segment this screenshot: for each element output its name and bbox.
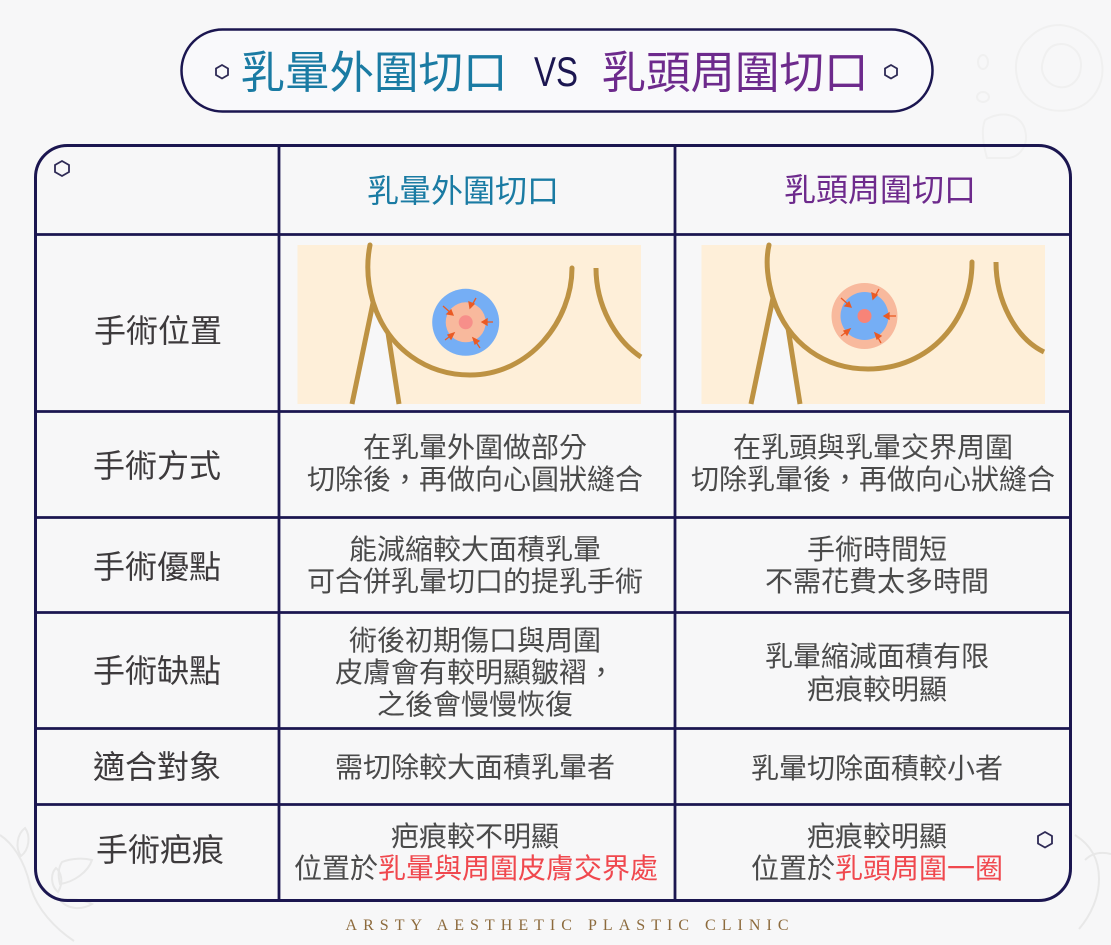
- column heading: areola: 乳暈外圍切口: [367, 173, 559, 209]
- disadvantages text: nipple: [765, 641, 989, 705]
- icon: hexagon left: [216, 65, 228, 78]
- icon: hexagon right: [885, 65, 897, 78]
- title: VS: VS: [534, 48, 578, 95]
- scar text: areola: [294, 821, 658, 884]
- title: nipple incision: 乳頭周圍切口: [601, 49, 869, 98]
- candidates text: areola: 需切除較大面積乳暈者: [335, 752, 615, 783]
- advantages text: nipple: 不需花費太多時間: [765, 566, 989, 597]
- row heading: position: 手術位置: [94, 313, 222, 349]
- comparison table: [35, 145, 1071, 900]
- scar text: nipple: [751, 821, 1003, 884]
- title: areola outer incision: 乳暈外圍切口: [240, 49, 508, 98]
- decoration: faint rose: [977, 25, 1102, 158]
- disadvantages text: areola: 皮膚會有較明顯皺褶，: [335, 657, 615, 688]
- method text: areola: 切除後，再做向心圓狀縫合: [307, 464, 643, 495]
- footer: clinic name: ARSTY AESTHETIC PLASTIC CLINIC: [346, 917, 789, 934]
- disadvantages text: areola: 術後初期傷口與周圍: [349, 625, 601, 656]
- method text: nipple: 切除乳暈後，再做向心狀縫合: [691, 464, 1055, 495]
- scar text: areola: 位置於乳暈與周圍皮膚交界處: [294, 853, 658, 884]
- scar text: nipple: 疤痕較明顯: [807, 821, 947, 852]
- table frame: [36, 146, 1070, 900]
- advantages text: areola: 可合併乳暈切口的提乳手術: [307, 566, 643, 597]
- disadvantages text: nipple: 疤痕較明顯: [807, 674, 947, 705]
- row heading: advantages: 手術優點: [93, 549, 221, 585]
- candidates text: nipple: 乳暈切除面積較小者: [751, 753, 1003, 784]
- row heading: scar: 手術疤痕: [96, 832, 224, 868]
- method text: areola: 在乳暈外圍做部分: [363, 432, 587, 463]
- disadvantages text: areola: 之後會慢慢恢復: [377, 689, 573, 720]
- illustration: areola incision: [298, 245, 641, 404]
- scar text: nipple: 位置於乳頭周圍一圈: [751, 853, 1003, 884]
- scar text: areola: 疤痕較不明顯: [391, 821, 559, 852]
- advantages text: nipple: [765, 534, 989, 597]
- illustration: nipple incision: [702, 245, 1045, 404]
- disadvantages text: areola: [335, 625, 615, 720]
- title pill: [182, 30, 932, 112]
- advantages text: areola: 能減縮較大面積乳暈: [349, 534, 601, 565]
- advantages text: areola: [307, 534, 643, 597]
- method text: nipple: 在乳頭與乳暈交界周圍: [733, 432, 1013, 463]
- row heading: candidates: 適合對象: [93, 749, 221, 785]
- icon: hexagon table bottom-right: [1038, 832, 1052, 848]
- icon: hexagon table top-left: [55, 161, 69, 176]
- method text: nipple: [691, 432, 1055, 495]
- advantages text: nipple: 手術時間短: [807, 534, 947, 565]
- row heading: method: 手術方式: [93, 448, 221, 484]
- method text: areola: [307, 432, 643, 495]
- row heading: disadvantages: 手術缺點: [93, 653, 221, 689]
- decoration: faint leaves: [0, 828, 1111, 941]
- disadvantages text: nipple: 乳暈縮減面積有限: [765, 641, 989, 672]
- column heading: nipple: 乳頭周圍切口: [784, 172, 976, 208]
